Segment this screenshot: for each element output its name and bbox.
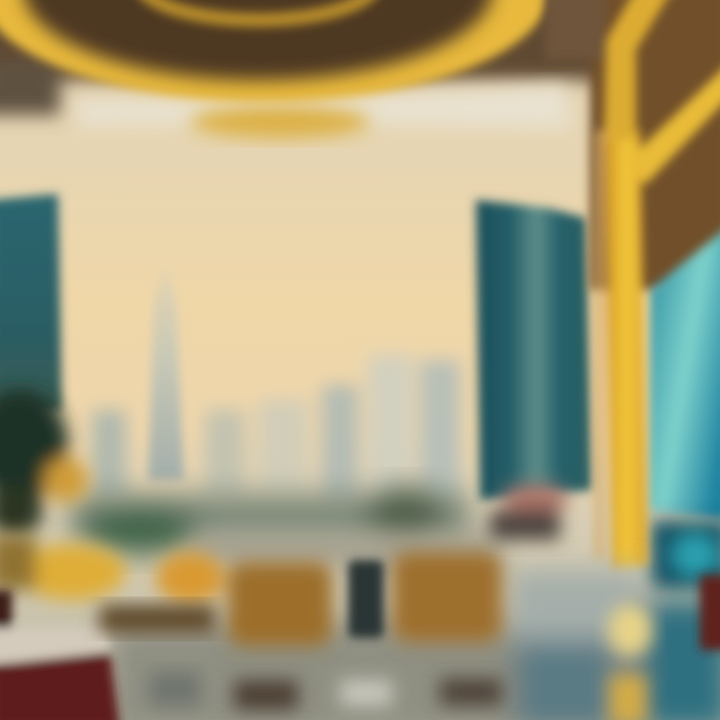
floor: lower room base xyxy=(110,535,720,720)
ceiling: inner gold ring xyxy=(140,0,376,20)
ceiling: white soffit strip xyxy=(75,85,570,128)
skyline: green city base xyxy=(70,487,470,554)
tower: left glass building xyxy=(0,194,62,420)
panel: teal artwork xyxy=(648,225,720,520)
chair: dark red furniture xyxy=(0,590,120,720)
skyline: tall spire tower xyxy=(148,262,184,480)
accent: pink flowers xyxy=(490,484,569,540)
chair: left gold seat xyxy=(0,535,126,600)
skyline: distant buildings xyxy=(92,355,460,505)
sofa: right gold cushion xyxy=(392,552,502,642)
tower: right glass building xyxy=(476,200,592,500)
floor: patterned tiles xyxy=(150,672,502,710)
wall: right brown panel xyxy=(545,0,720,290)
accent: gold lamp reflections xyxy=(608,604,652,720)
panel: dark teal base xyxy=(650,520,720,590)
ceiling: gold pendant glow xyxy=(190,106,370,138)
sofa: dark centre table xyxy=(348,560,384,638)
ceiling: dark dome xyxy=(23,0,493,80)
ceiling: gold ring around dome xyxy=(0,0,550,102)
accent: dark red object right xyxy=(700,575,720,650)
pillar: gold column with diagonal beams xyxy=(594,0,720,570)
sofa: left gold cushion xyxy=(156,552,332,646)
chair: brown side shadow xyxy=(100,605,215,633)
plant: dark foliage with lit leaves xyxy=(0,389,88,536)
ceiling: dark upper band xyxy=(0,0,620,115)
